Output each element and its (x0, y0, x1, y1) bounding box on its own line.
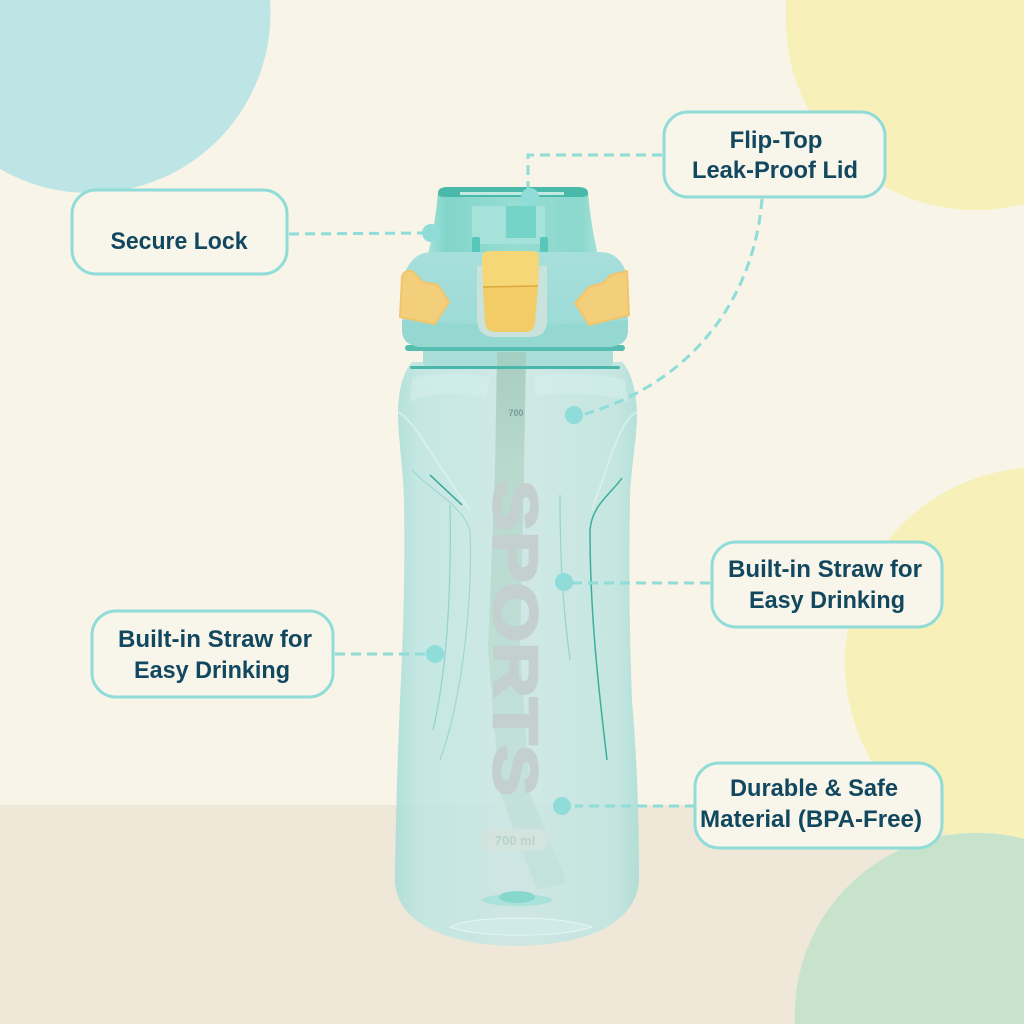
right yellow grip (575, 271, 629, 325)
shoulder highlights (410, 374, 628, 402)
label text (118, 626, 312, 684)
label text: Built-in Straw for (118, 626, 312, 653)
connector (572, 582, 710, 584)
label text (692, 127, 858, 184)
label text: Built-in Straw for (728, 556, 922, 583)
connector: flip-top (528, 155, 662, 190)
volume badge (481, 829, 549, 851)
neck ring (405, 345, 625, 369)
label text: Easy Drinking (134, 657, 290, 684)
anchor dot (555, 573, 573, 591)
anchor dot (521, 188, 539, 206)
label box (664, 112, 885, 197)
anchor dot (422, 224, 440, 242)
label text: Material (BPA-Free) (700, 806, 922, 833)
anchor dot: body shoulder (565, 406, 583, 424)
table surface (0, 805, 1024, 1024)
base dimple (482, 891, 552, 906)
lock clip surround (477, 266, 547, 337)
callout: flip-top lid (521, 112, 885, 206)
bottle body (395, 362, 639, 946)
label box (712, 542, 942, 627)
label box (72, 190, 287, 274)
label text (728, 556, 922, 614)
anchor dot (426, 645, 444, 663)
silicone cap band (402, 252, 628, 347)
connector: secure lock (289, 233, 424, 234)
label text: Secure Lock (110, 228, 248, 255)
callout: durable material (553, 763, 942, 848)
decorative circle: top left (0, 0, 270, 193)
label box (92, 611, 333, 697)
decorative circle: top right (786, 0, 1024, 210)
bottle (395, 187, 639, 946)
decorative circle: bottom right (795, 833, 1024, 1024)
callout: straw right (555, 542, 942, 627)
clear flip-top lid (428, 187, 598, 263)
label text: Easy Drinking (749, 587, 905, 614)
base highlight (450, 918, 592, 935)
label text: Flip-Top (730, 127, 822, 154)
decorative circle: right (845, 468, 1024, 857)
body contour lines (398, 412, 637, 760)
label box (695, 763, 942, 848)
internal straw (488, 352, 567, 890)
label text: Durable & Safe (730, 775, 898, 802)
volume badge: 700 ml (495, 833, 535, 848)
yellow lock clip (482, 251, 539, 332)
SPORTS lettering: SPORTS (480, 480, 549, 796)
callout: straw left (92, 611, 444, 697)
callout: secure lock (72, 190, 440, 274)
connector: lid to body (585, 199, 762, 414)
label text: Leak-Proof Lid (692, 157, 858, 184)
connector (335, 652, 427, 656)
connector (575, 804, 695, 808)
anchor dot (553, 797, 571, 815)
label text (700, 775, 922, 833)
left yellow grip (400, 271, 449, 324)
capacity mark: 700 (508, 408, 524, 418)
